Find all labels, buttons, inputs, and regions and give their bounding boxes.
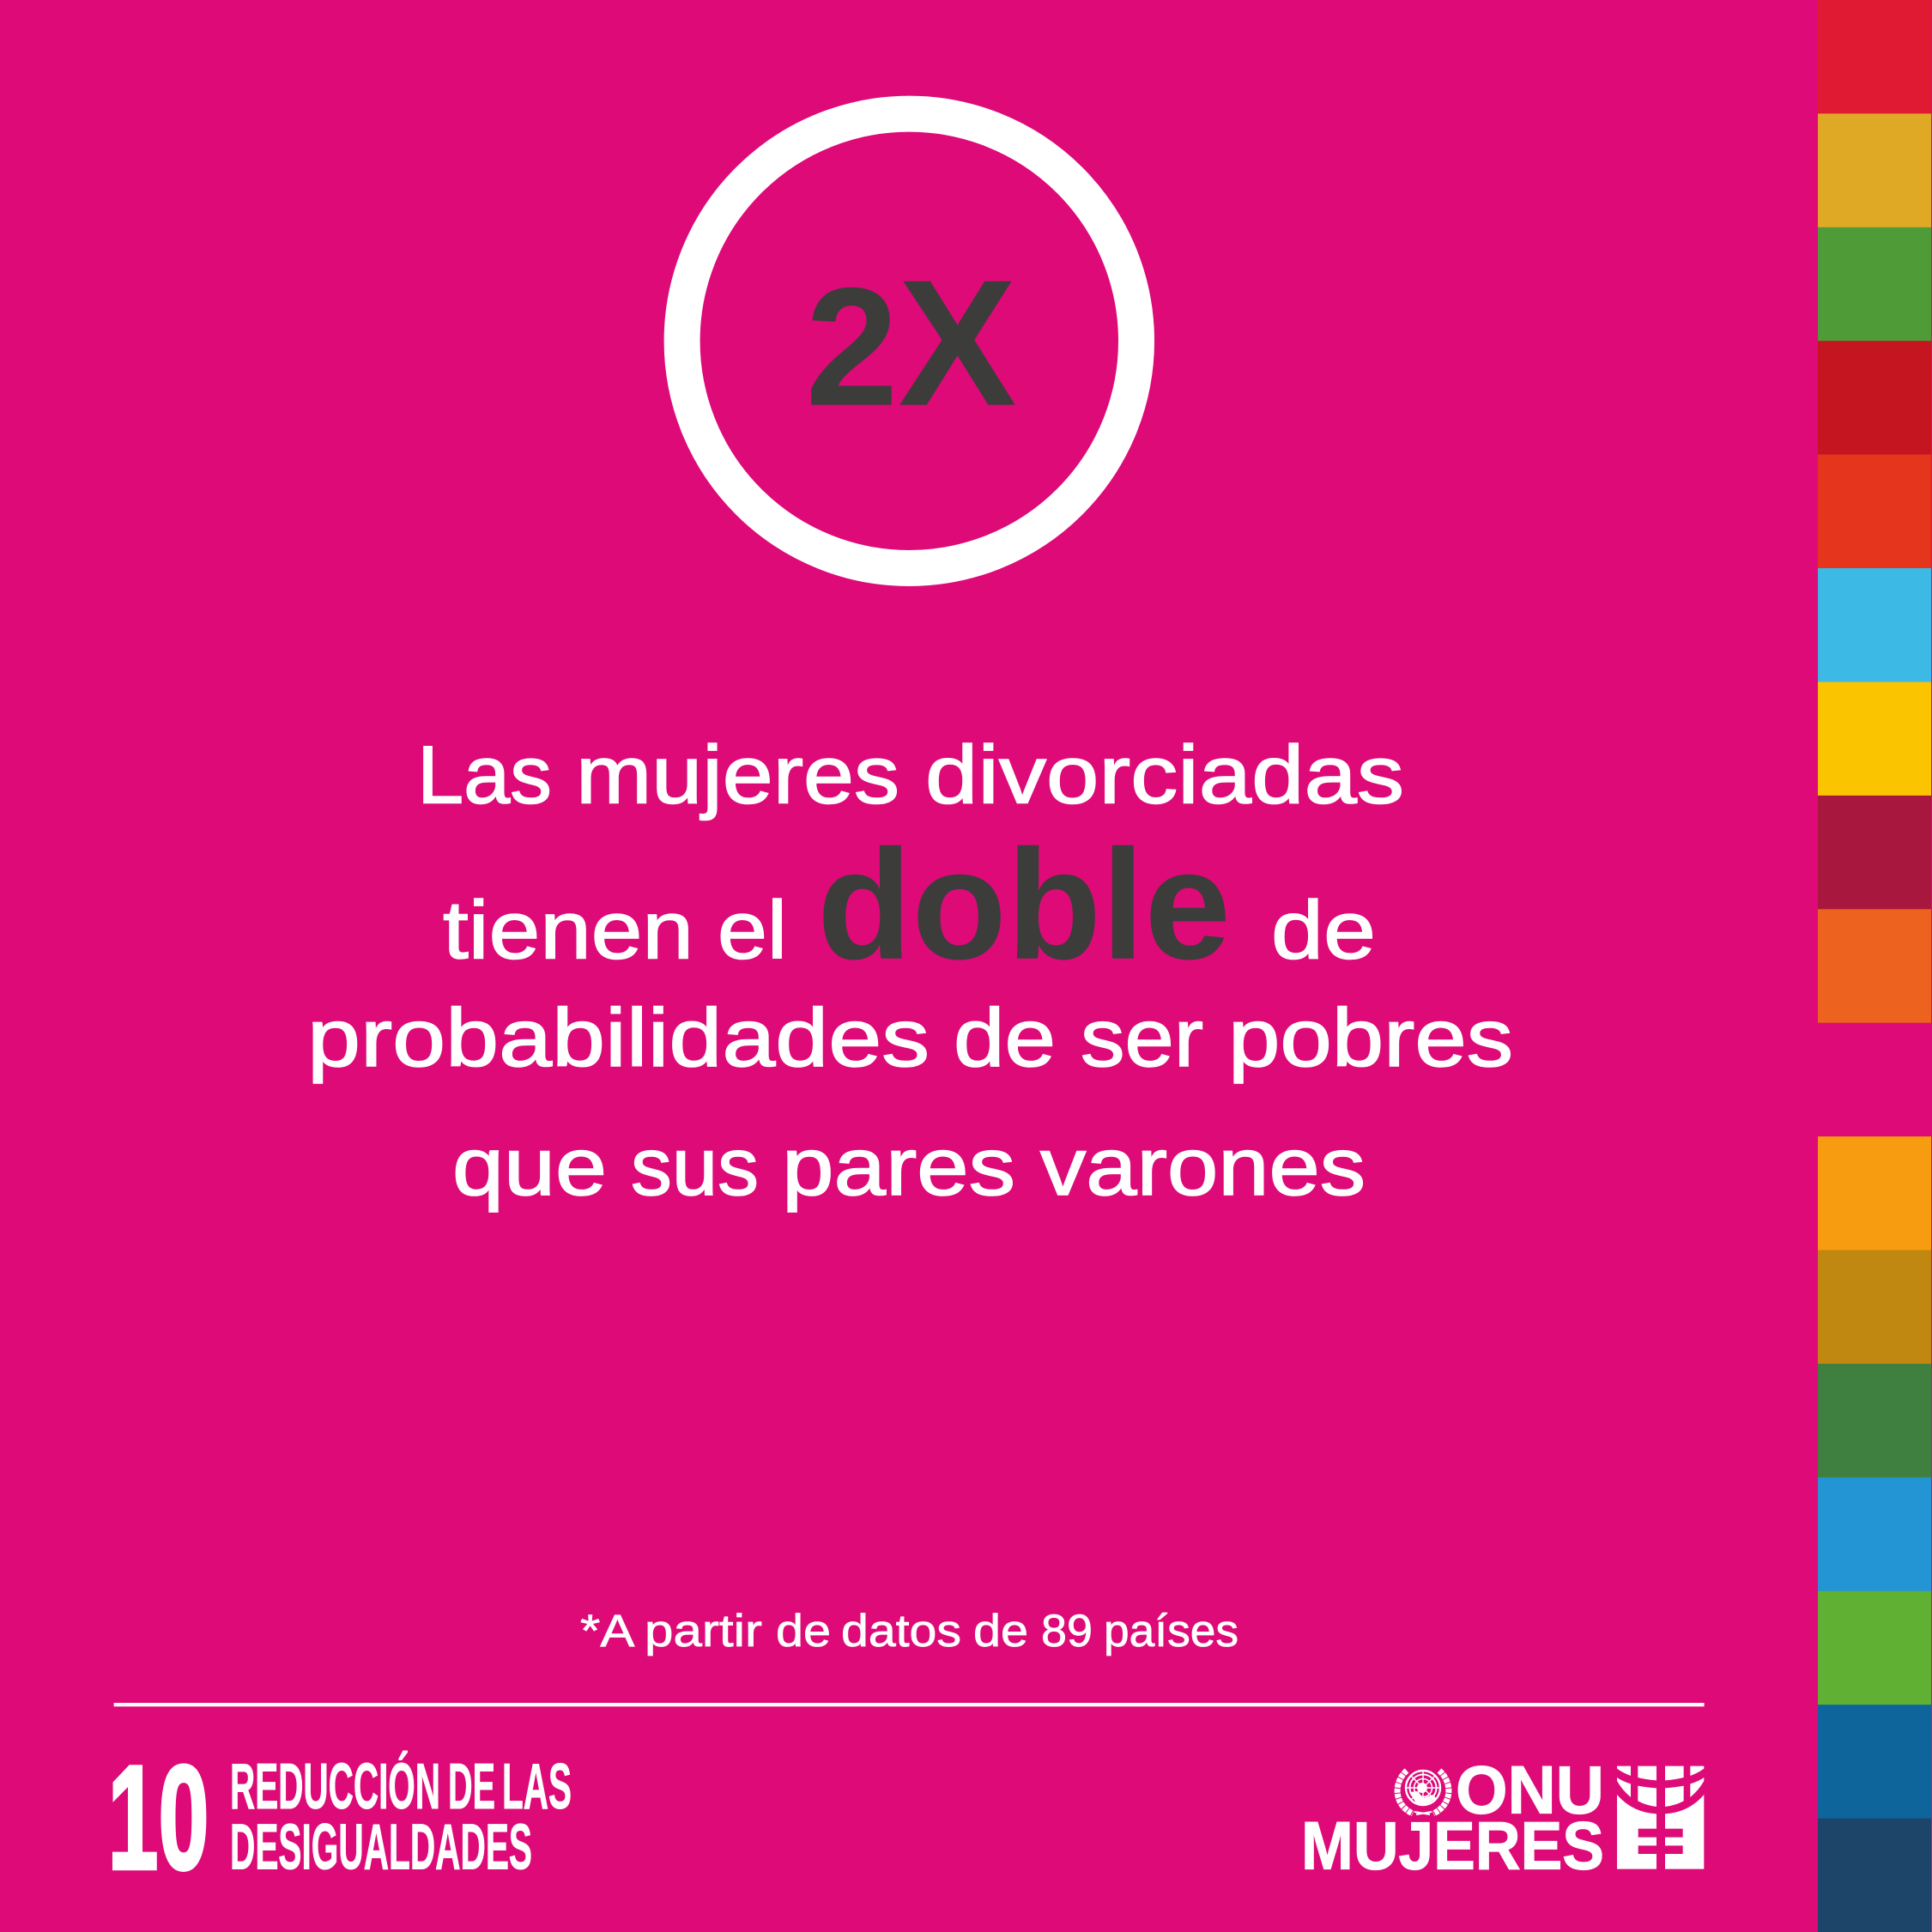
line 3: pobres: [1228, 992, 1513, 1084]
goal title line 1: REDUCCIÓN: [230, 1750, 440, 1822]
icon: UN Women symbol: [1617, 1766, 1704, 1869]
statistic: 2X: 2X: [805, 244, 1016, 444]
goal title line 2: DESIGUALDADES: [230, 1810, 532, 1882]
footnote: *A: [580, 1606, 635, 1656]
line 2 start: tienen: [443, 885, 693, 977]
line 3: ser: [1081, 992, 1203, 1084]
logo: ONU Mujeres: [1301, 1751, 1704, 1883]
ring with 2X statistic: [682, 114, 1136, 568]
footnote: datos: [841, 1606, 961, 1656]
footnote: países: [1104, 1606, 1239, 1656]
goal title line 1: LAS: [502, 1750, 572, 1822]
highlighted word: doble: doble: [817, 817, 1231, 992]
line 1: divorciadas: [925, 730, 1404, 821]
line 1: Las: [417, 730, 552, 821]
line 3: de: [954, 992, 1056, 1084]
line 4: sus: [631, 1121, 759, 1213]
footnote: partir: [645, 1606, 762, 1656]
line 4: pares: [782, 1121, 1015, 1213]
goal number 10: 10: [108, 1734, 209, 1900]
wordmark: ONU: ONU: [1456, 1751, 1604, 1828]
line 4: varones: [1040, 1121, 1366, 1213]
footnote: de: [776, 1606, 831, 1656]
line 2 end: de: [1271, 885, 1376, 977]
line 3: probabilidades: [307, 992, 930, 1084]
icon: UN emblem: [1397, 1771, 1449, 1814]
goal title line 1: DE: [448, 1750, 495, 1822]
main message text block: [307, 730, 1513, 1213]
footnote: de: [973, 1606, 1028, 1656]
panel: SDG colour strip: [1818, 0, 1931, 1932]
wordmark: MUJERES: MUJERES: [1301, 1807, 1604, 1883]
line 1: mujeres: [576, 730, 899, 821]
line 2 start: el: [718, 885, 787, 977]
line 4: que: [452, 1121, 607, 1213]
goal title: [230, 1750, 572, 1882]
footnote: 89: [1041, 1606, 1093, 1656]
